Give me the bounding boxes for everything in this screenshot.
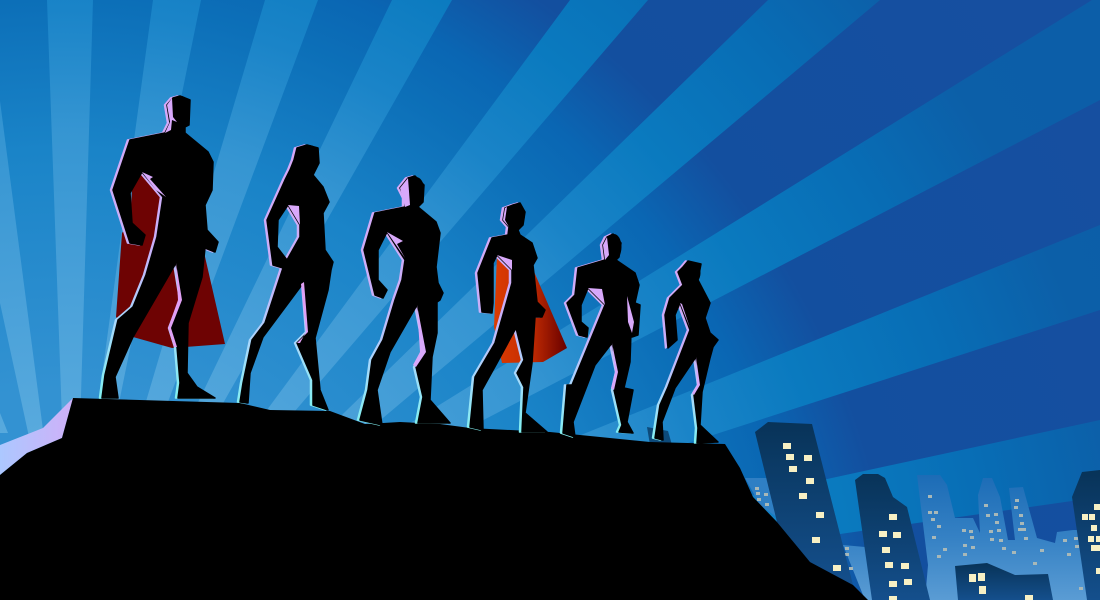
foreground tower 2 [855,474,930,600]
background city skyline [647,427,1100,600]
foreground tower 4 [1072,470,1100,600]
rocky cliff [0,398,868,600]
foreground tower 1 [755,422,853,585]
hero 3 [358,176,450,425]
foreground tower 3 [955,563,1053,600]
hero 4 with orange-red cape [468,203,567,432]
distant lit windows [755,487,1083,590]
hero 5 [560,234,640,437]
hero 6 [652,261,718,443]
hero 1 with dark red cape [100,96,225,398]
hero 2 [238,145,333,410]
